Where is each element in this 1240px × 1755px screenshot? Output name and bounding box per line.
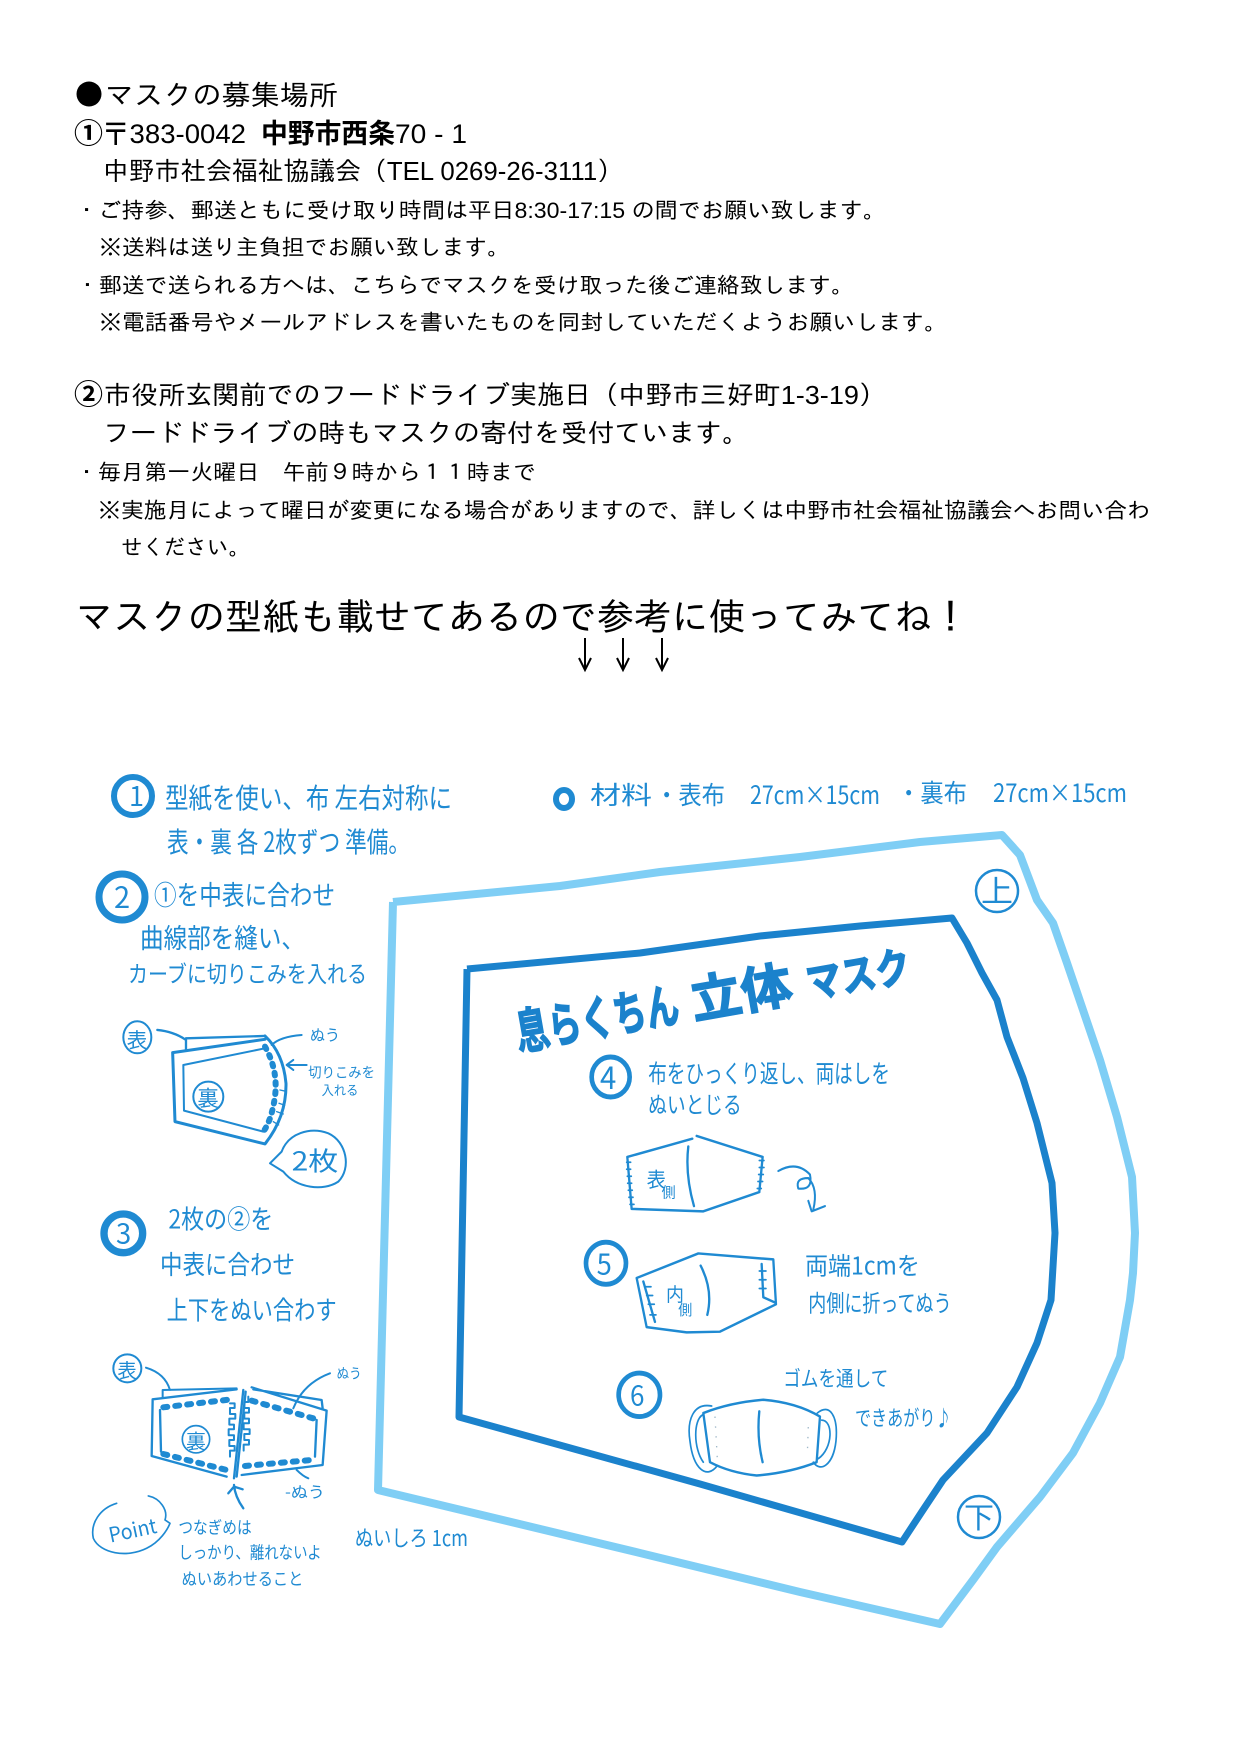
step 1 text: 表・裏 各 2枚ずつ 準備。 <box>167 821 410 861</box>
diagram: step 3 joined pieces: ぬう <box>337 1363 362 1383</box>
step 1 badge: 1 <box>129 775 144 814</box>
point explanation text <box>178 1513 322 1590</box>
note: schedule changes: ※実施月によって曜日が変更になる場合がありますので、詳しくは中野市社会福祉協議会へお問い合わ <box>98 498 1150 523</box>
materials text: ・表布 <box>655 776 725 812</box>
diagram: step 2 sewn piece <box>123 1021 375 1144</box>
step 4 text <box>648 1054 890 1120</box>
diagram: folded mask inside: 内 <box>666 1280 684 1307</box>
diagram: step 2 sewn piece: 入れる <box>322 1080 358 1099</box>
step 2 badge: 2 <box>114 875 130 917</box>
step 2 text: 曲線部を縫い、 <box>140 917 305 956</box>
step 5 text: 両端1cmを <box>805 1246 920 1282</box>
step 2 badge <box>99 874 145 920</box>
point explanation text: しっかり、離れないよ <box>178 1538 322 1563</box>
pattern outline: inner sewing line <box>459 918 1055 1542</box>
step 4 <box>592 1053 890 1211</box>
step 3 <box>93 1199 468 1590</box>
callout: point bubble: Point <box>106 1509 159 1548</box>
step 2 <box>99 874 375 1187</box>
note: reception hours: ・ご持参、郵送ともに受け取り時間は平日8:30-17:15 の間でお願い致します。 <box>75 198 886 223</box>
step 5 text: 内側に折ってぬう <box>808 1285 952 1319</box>
diagram: step 3 joined pieces: -ぬう <box>285 1480 325 1502</box>
materials text: 材料 <box>590 776 652 812</box>
marker: bottom <box>958 1495 1000 1538</box>
diagram: finished mask <box>689 1400 836 1475</box>
step 6 badge: 6 <box>630 1374 644 1414</box>
note: enclose contact details: ※電話番号やメールアドレスを書いたものを同封していただくようお願いします。 <box>99 310 947 335</box>
callout: two pieces <box>270 1131 346 1187</box>
diagram: folded mask inside: 側 <box>678 1298 692 1320</box>
diagram: step 3 joined pieces: 裏 <box>186 1425 206 1454</box>
pattern outline: outer cut line <box>378 835 1135 1624</box>
step 2 text: ①を中表に合わせ <box>154 874 335 913</box>
step 3 badge <box>104 1211 143 1253</box>
diagram: step 3 joined pieces: 表 <box>117 1355 137 1383</box>
materials text <box>590 774 1127 812</box>
step 1 badge <box>114 775 152 815</box>
heading: collection places: マスクの募集場所 <box>105 80 338 111</box>
diagram: step 2 sewn piece: 切りこみを <box>308 1062 375 1082</box>
marker: top: 上 <box>981 867 1013 911</box>
step 4 text: 布をひっくり返し、両はしを <box>648 1054 890 1091</box>
step 3 badge: 3 <box>116 1211 131 1251</box>
step 1 <box>114 775 452 861</box>
materials text: 27cm×15cm <box>993 774 1127 810</box>
materials list <box>556 774 1127 812</box>
address line 1 <box>74 118 467 149</box>
diagram: turned mask: 側 <box>662 1181 676 1202</box>
materials text: 27cm×15cm <box>750 776 880 812</box>
callout: two pieces: 2枚 <box>292 1142 338 1179</box>
location 2 subheading: フードドライブの時もマスクの寄付を受付ています。 <box>103 418 749 448</box>
step 4 badge: 4 <box>600 1053 616 1098</box>
title: easy-breathing 3D mask <box>509 924 915 1065</box>
address line 1: 70 - 1 <box>395 119 467 149</box>
callout: pattern included: マスクの型紙も載せてあるので参考に使ってみてね！ <box>76 597 969 638</box>
address line 1: 〒383-0042 <box>102 119 246 149</box>
arrow: turn over <box>778 1166 825 1211</box>
address line 1: 中野市西条 <box>261 119 395 149</box>
step 2 text: カーブに切りこみを入れる <box>128 955 367 989</box>
step 3 text: 上下をぬい合わす <box>167 1290 337 1327</box>
note: schedule: ・毎月第一火曜日 午前９時から１１時まで <box>75 460 536 485</box>
location 2 heading: 市役所玄関前でのフードドライブ実施日（中野市三好町1-3-19） <box>104 380 886 410</box>
address line 2: 中野市社会福祉協議会（TEL 0269-26-3111） <box>103 156 623 186</box>
diagram: folded mask inside <box>637 1253 776 1332</box>
diagram: turned mask: 表 <box>647 1163 666 1193</box>
arrows pointing down <box>579 638 668 670</box>
diagram: step 2 sewn piece: 裏 <box>197 1082 219 1113</box>
step 3 text <box>160 1199 337 1327</box>
location 2 heading: ② <box>74 379 103 410</box>
title: easy-breathing 3D mask: 立体 <box>684 945 797 1034</box>
marker: top <box>976 867 1018 912</box>
step 5 badge <box>586 1242 626 1284</box>
step 6 text: できあがり♪ <box>855 1401 952 1431</box>
step 6 text: ゴムを通して <box>783 1361 888 1392</box>
step 5 <box>586 1242 952 1332</box>
address line 1: ① <box>74 118 103 149</box>
diagram: step 2 sewn piece: ぬう <box>310 1024 340 1046</box>
step 2 text <box>128 874 367 989</box>
point explanation text: つなぎめは <box>178 1513 252 1538</box>
section: mask collection locations text <box>74 80 1150 670</box>
step 6 badge <box>619 1373 660 1417</box>
step 1 text: 型紙を使い、布 左右対称に <box>165 777 452 817</box>
marker: bottom: 下 <box>964 1495 994 1537</box>
steps 4 to 6 <box>586 1053 952 1475</box>
step 1 text <box>165 777 452 861</box>
step 5 badge: 5 <box>597 1242 612 1284</box>
step 4 badge <box>592 1053 630 1098</box>
diagram: turned mask <box>627 1136 764 1211</box>
diagram: step 3 joined pieces <box>113 1354 362 1508</box>
seam allowance label: ぬいしろ 1cm <box>355 1521 468 1553</box>
diagram: step 2 sewn piece: 表 <box>127 1023 147 1053</box>
note: schedule changes continued: せください。 <box>121 535 250 560</box>
step 3 text: 中表に合わせ <box>160 1245 295 1282</box>
title: easy-breathing 3D mask: 息らくちん <box>509 966 684 1064</box>
callout: point bubble <box>93 1496 170 1554</box>
step 6 <box>619 1361 952 1475</box>
step 5 text <box>805 1246 952 1319</box>
note: contact after receipt: ・郵送で送られる方へは、こちらでマスクを受け取った後ご連絡致します。 <box>76 273 854 298</box>
step 6 text <box>783 1361 952 1431</box>
point explanation text: ぬいあわせること <box>182 1565 303 1590</box>
note: postage: ※送料は送り主負担でお願い致します。 <box>99 235 510 260</box>
step 3 text: 2枚の②を <box>168 1199 273 1236</box>
materials text: ・裏布 <box>897 774 967 810</box>
title: easy-breathing 3D mask: マスク <box>801 933 915 1011</box>
icon: materials bullet <box>556 790 572 808</box>
step 4 text: ぬいとじる <box>648 1086 742 1120</box>
